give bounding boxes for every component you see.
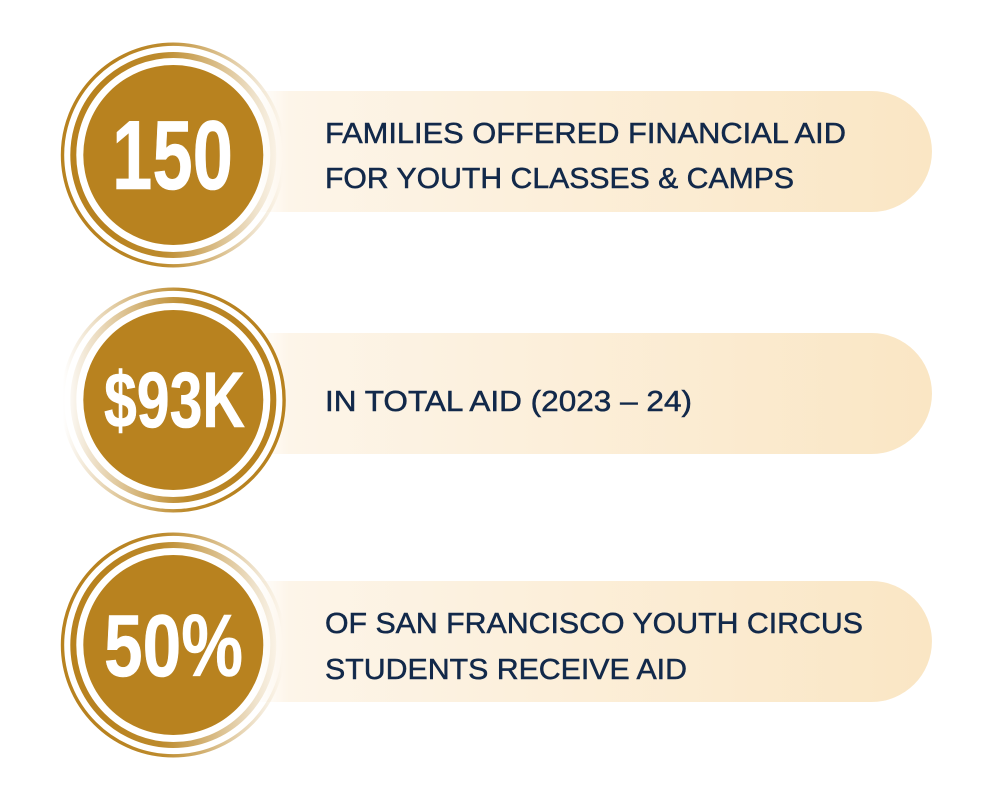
badge: $93K: [62, 289, 284, 511]
bar: families: [255, 91, 932, 212]
text: students description: OF SAN FRANCISCO YOUTH CIRCUS: [325, 608, 863, 640]
number: 150: 150: [112, 100, 233, 210]
panel: percent of students: [62, 534, 932, 756]
badge: 150: [62, 44, 284, 266]
badge: 50%: [62, 534, 284, 756]
text: families description: FAMILIES OFFERED FINANCIAL AID: [325, 118, 846, 150]
number: 50%: 50%: [104, 596, 243, 695]
text: families description: [325, 118, 846, 195]
panel: families offered aid: [62, 44, 932, 266]
text: students description: [325, 608, 863, 686]
bar: students: [255, 581, 932, 702]
text: students description: STUDENTS RECEIVE AID: [325, 654, 687, 686]
text: total aid description: IN TOTAL AID (2023 – 24): [325, 386, 692, 418]
bar: total aid: [255, 333, 932, 454]
text: families description: FOR YOUTH CLASSES & CAMPS: [325, 163, 794, 195]
panel: total aid: [62, 289, 932, 511]
number: $93K: $93K: [104, 355, 245, 444]
